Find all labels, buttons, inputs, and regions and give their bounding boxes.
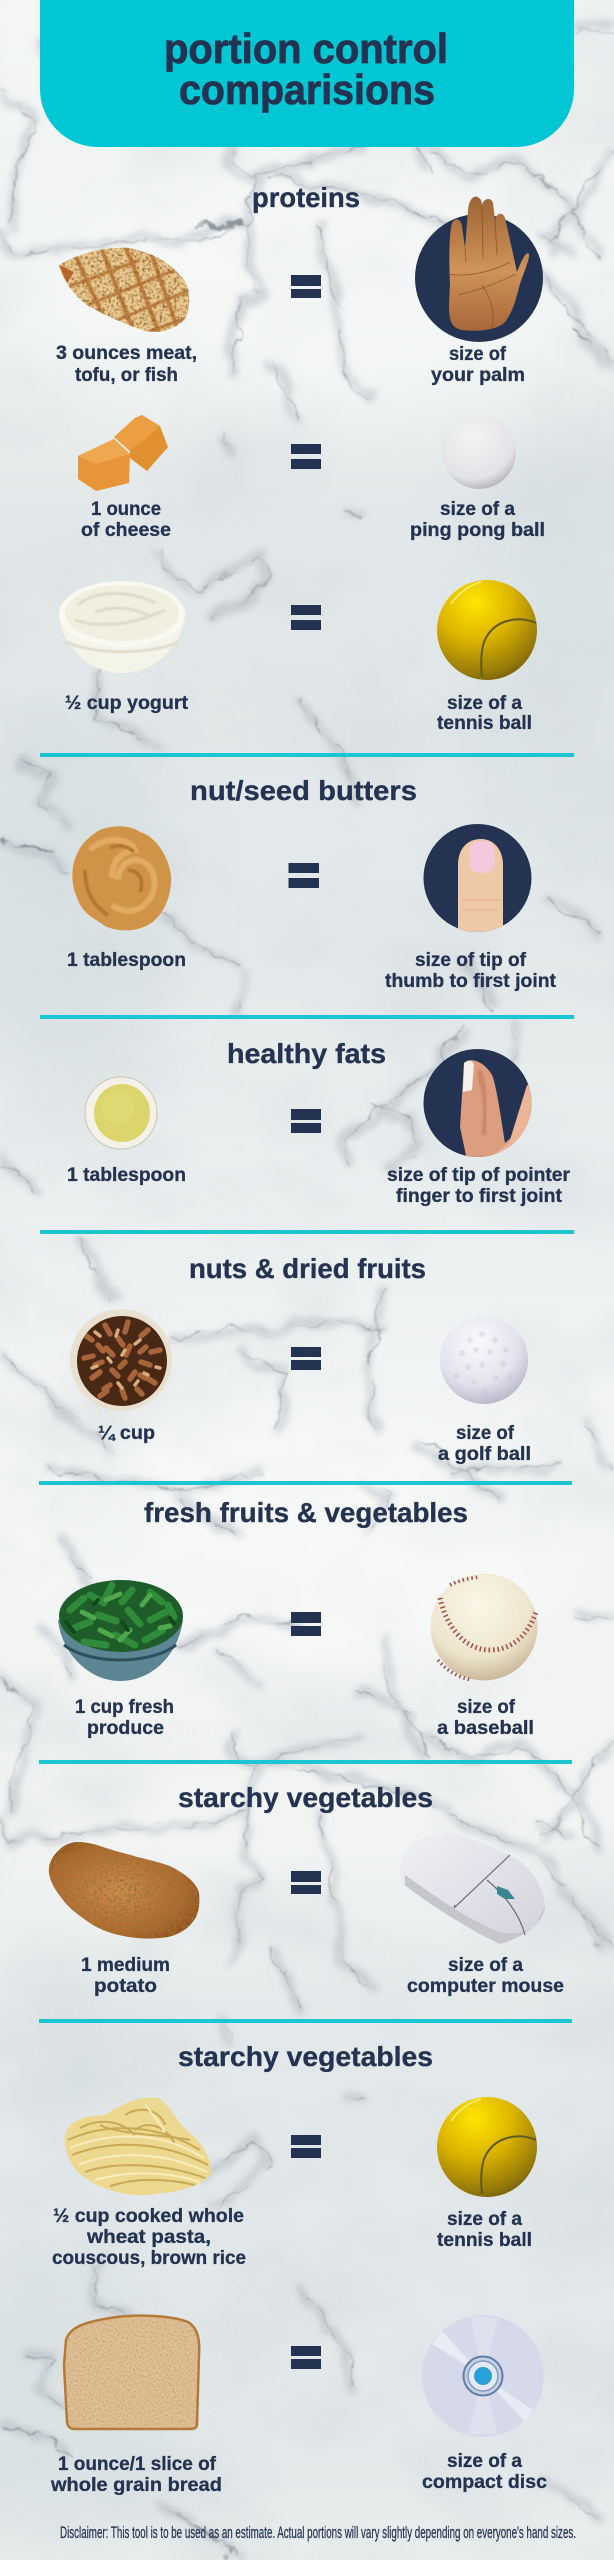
icon: pasta nest (65, 2097, 211, 2195)
icon: golf ball (440, 1316, 528, 1404)
label: thumb to first joint: size of tip of (415, 949, 526, 971)
label: 1 medium potato: potato (94, 1975, 157, 1997)
header banner (40, 0, 574, 147)
label: compact disc (422, 2450, 547, 2493)
equals sign (291, 1612, 321, 1636)
label: 3 ounces: 3 ounces meat, (56, 342, 197, 364)
label: tennis ball: tennis ball (437, 2229, 532, 2251)
label: tennis ball: size of a (447, 2208, 522, 2230)
label: baseball: a baseball (437, 1717, 534, 1739)
label: 1 tablespoon: 1 tablespoon (67, 949, 186, 971)
icon: baseball (430, 1574, 538, 1680)
icon: tennis ball (437, 580, 537, 680)
icon: yogurt bowl (59, 581, 185, 673)
label: 3 ounces (56, 342, 197, 386)
label: bread: 1 ounce/1 slice of (58, 2453, 216, 2475)
icon: oil dish (85, 1077, 157, 1149)
icon: pecan bowl (70, 1309, 172, 1411)
label: pointer finger (387, 1164, 570, 1207)
label: bread (50, 2453, 222, 2496)
equals sign (291, 1871, 321, 1894)
label: tennis ball (437, 2208, 532, 2251)
label: golf ball (438, 1422, 531, 1465)
icon: cheese cubes (78, 415, 168, 491)
label: 1 cup fresh produce: 1 cup fresh (75, 1696, 174, 1718)
label: your palm: your palm (431, 364, 525, 386)
label: compact disc: compact disc (422, 2471, 547, 2493)
title: portion control (164, 25, 448, 72)
icon: pointer finger in circle (424, 1049, 535, 1165)
heading: starchy vegetables: starchy vegetables (178, 1782, 433, 1813)
equals sign (291, 275, 321, 298)
label: pasta (52, 2205, 246, 2269)
label: golf ball: size of (456, 1422, 514, 1444)
icon: thumb in circle (424, 824, 532, 940)
label: 1 ounce of cheese: of cheese (81, 519, 171, 541)
label: quarter cup: ¼ cup (98, 1422, 155, 1444)
label: computer mouse: size of a (448, 1954, 523, 1976)
icon: ping pong ball (442, 415, 516, 489)
label: baseball: size of (457, 1696, 515, 1718)
label: thumb to first joint (385, 949, 556, 992)
label: half cup yogurt: ½ cup yogurt (65, 692, 188, 714)
label: compact disc: size of a (447, 2450, 522, 2472)
heading: nut/seed butters: nut/seed butters (190, 775, 417, 806)
label: computer mouse (407, 1954, 564, 1997)
label: bread: whole grain bread (50, 2474, 222, 2496)
equals sign (291, 444, 321, 469)
label: 1 medium potato: 1 medium (81, 1954, 170, 1976)
label: ping pong ball: ping pong ball (410, 519, 545, 541)
label: 1 cup fresh produce (75, 1696, 174, 1739)
icon: potato (49, 1842, 199, 1938)
equals sign (288, 863, 319, 888)
icon: bread slice (64, 2316, 199, 2429)
label: your palm: size of (449, 343, 506, 365)
label: pasta: wheat pasta, (86, 2226, 211, 2248)
label: 1 ounce of cheese: 1 ounce (91, 498, 161, 520)
heading: healthy fats: healthy fats (227, 1038, 386, 1069)
label: 1 ounce of cheese (81, 498, 171, 541)
title (164, 25, 448, 113)
label: tennis ball (437, 692, 532, 734)
label: your palm (431, 343, 525, 386)
heading: proteins: proteins (252, 182, 360, 213)
label: golf ball: a golf ball (438, 1443, 531, 1465)
heading: starchy vegetables: starchy vegetables (178, 2041, 433, 2072)
label: ping pong ball: size of a (440, 498, 515, 520)
icon: grilled chicken (59, 248, 190, 332)
label: pointer finger: size of tip of pointer (387, 1164, 570, 1186)
label: 3 ounces: tofu, or fish (75, 364, 178, 386)
icon: peanut butter (72, 826, 171, 930)
heading: fresh fruits and vegetables: fresh fruits & vegetables (144, 1497, 468, 1528)
label: 1 tablespoon: 1 tablespoon (67, 1164, 186, 1186)
icon: green beans bowl (58, 1580, 183, 1681)
label: tennis ball: size of a (447, 692, 522, 714)
icon: compact disc (422, 2315, 544, 2437)
label: tennis ball: tennis ball (437, 712, 532, 734)
label: pointer finger: finger to first joint (396, 1185, 562, 1207)
label: baseball (437, 1696, 534, 1739)
label: pasta: ½ cup cooked whole (53, 2205, 244, 2227)
label: 1 medium potato (81, 1954, 170, 1997)
label: thumb to first joint: thumb to first joint (385, 970, 556, 992)
equals sign (291, 1347, 321, 1370)
equals sign (291, 605, 321, 630)
label: 1 cup fresh produce: produce (87, 1717, 164, 1739)
equals sign (291, 2346, 321, 2369)
title: comparisions (179, 66, 435, 113)
label: computer mouse: computer mouse (407, 1975, 564, 1997)
equals sign (291, 1109, 321, 1133)
equals sign (291, 2135, 321, 2158)
icon: tennis ball (437, 2097, 537, 2197)
icon: computer mouse (400, 1833, 545, 1944)
icon: palm in circle (415, 196, 543, 342)
heading: nuts and dried fruits: nuts & dried fruits (189, 1253, 426, 1284)
label: ping pong ball (410, 498, 545, 541)
label: pasta: couscous, brown rice (52, 2247, 246, 2269)
